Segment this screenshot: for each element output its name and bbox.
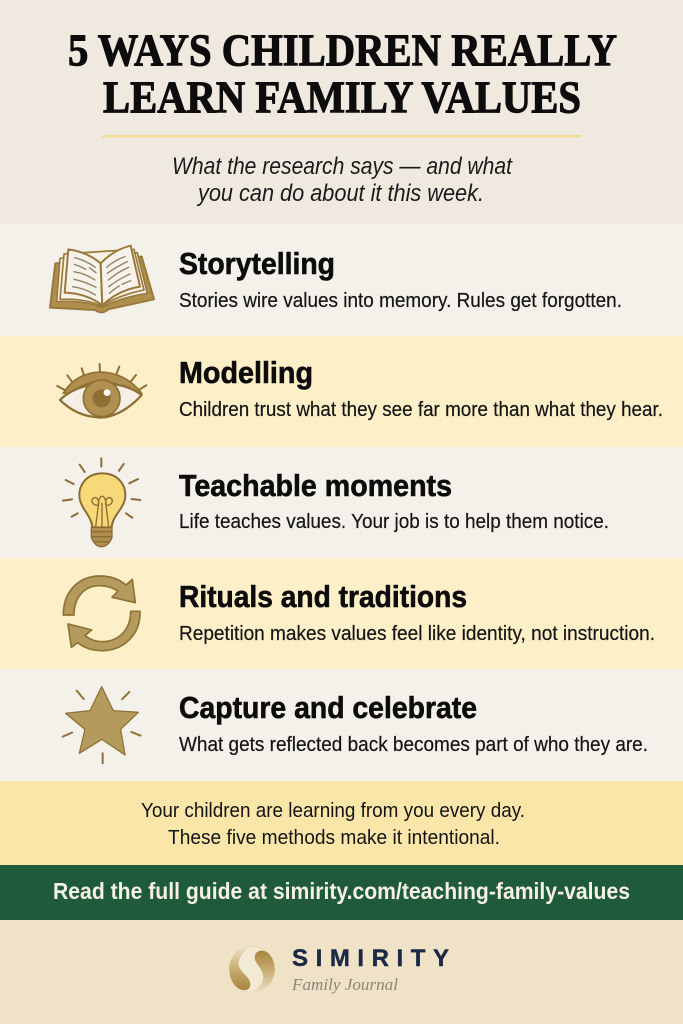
description: Storytelling: Stories wire values into memory. Rules get forgotten. (179, 289, 622, 312)
icon: open book (50, 246, 154, 312)
header panel (0, 0, 683, 224)
heading: Modelling: Modelling (179, 355, 313, 390)
brand name: SIMIRITY (292, 945, 449, 972)
closing message: These five methods make it intentional. (168, 826, 500, 849)
title: LEARN FAMILY VALUES (103, 72, 581, 122)
panel: storytelling (0, 224, 683, 336)
call to action banner (0, 865, 683, 920)
icon: star (63, 687, 141, 763)
heading: Rituals and traditions: Rituals and traditions (179, 579, 467, 614)
description: Capture and celebrate: What gets reflected back becomes part of who they are. (179, 733, 648, 756)
heading: Teachable moments: Teachable moments (179, 468, 452, 503)
panel: rituals and traditions (0, 558, 683, 669)
closing message: Your children are learning from you every day. (141, 799, 525, 822)
footer (0, 920, 683, 1024)
call to action banner: Read the full guide at simirity.com/teaching-family-values (53, 878, 630, 904)
subtitle (172, 153, 513, 207)
title: 5 WAYS CHILDREN REALLY (68, 26, 617, 76)
logo mark (229, 947, 275, 992)
icon: cycle arrows (63, 576, 140, 651)
closing message (0, 781, 683, 865)
tagline: Family Journal (291, 975, 398, 994)
panel: capture and celebrate (0, 669, 683, 781)
description: Teachable moments: Life teaches values. Your job is to help them notice. (179, 510, 609, 533)
subtitle: What the research says — and what (172, 153, 513, 180)
icon: light bulb (63, 458, 140, 547)
heading: Capture and celebrate: Capture and celebrate (179, 690, 477, 725)
panel: modelling (0, 336, 683, 447)
description: Rituals and traditions: Repetition makes values feel like identity, not instruction. (179, 622, 655, 645)
heading: Storytelling: Storytelling (179, 246, 335, 281)
subtitle: you can do about it this week. (196, 180, 484, 207)
panel: teachable moments (0, 447, 683, 558)
icon: eye (57, 364, 146, 417)
title (68, 26, 617, 122)
